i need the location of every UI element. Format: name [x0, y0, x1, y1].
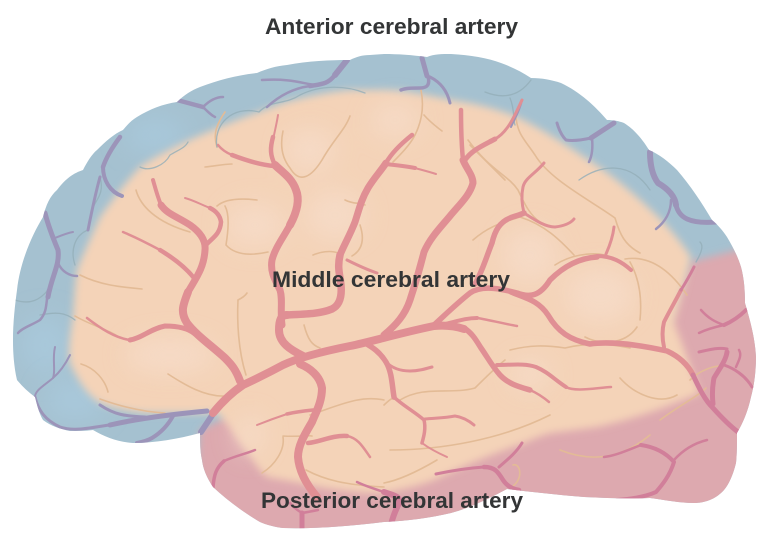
posterior cerebral artery branches: [213, 267, 752, 530]
label: middle cerebral artery: Middle cerebral artery: [272, 267, 511, 292]
label: anterior cerebral artery: Anterior cerebral artery: [265, 14, 519, 39]
sulci: [15, 80, 725, 488]
anterior cerebral artery branches: [18, 58, 716, 443]
cortex highlights: [125, 102, 635, 455]
label: posterior cerebral artery: Posterior cerebral artery: [261, 488, 524, 513]
main trunk: [213, 326, 464, 413]
posterior territory: [196, 247, 756, 528]
middle cerebral artery branches: [87, 100, 693, 497]
middle territory: [69, 90, 700, 493]
